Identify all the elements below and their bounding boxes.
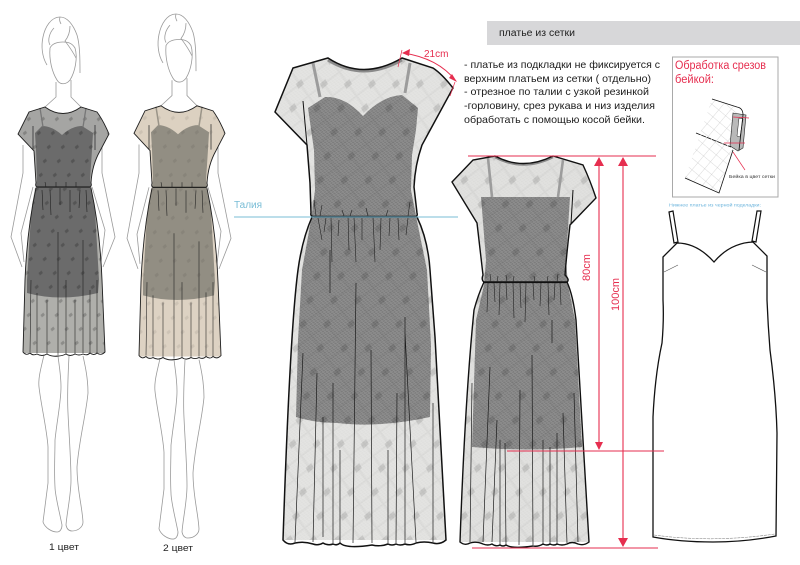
figure 2: dress colour 2	[134, 106, 225, 360]
slip dress caption: Нижнее платье из черной подкладки:	[669, 202, 761, 208]
header text: платье из сетки	[499, 28, 575, 39]
second dress: back view	[452, 156, 596, 547]
description text block: - платье из подкладки не фиксируется с	[464, 59, 660, 71]
dress outline	[452, 156, 596, 282]
arrow: 80cm	[594, 157, 604, 450]
value: 80cm: 80cm	[581, 254, 593, 281]
sleeve measurement: 21cm	[398, 49, 457, 96]
length measurements	[468, 156, 664, 548]
arrow: 100cm	[618, 157, 628, 547]
large dress: front view	[275, 58, 453, 547]
label: waist: Талия	[234, 200, 262, 211]
darts	[664, 265, 766, 272]
hem stitch	[654, 534, 775, 539]
waist marker line	[234, 216, 458, 218]
panel heading: Обработка срезов	[675, 60, 766, 72]
figure 2: croquis outline	[127, 14, 231, 539]
binding caption: Бейка в цвет сетки	[729, 174, 776, 179]
lace pattern	[275, 59, 453, 217]
value: 21cm: 21cm	[424, 49, 448, 60]
straps	[669, 211, 761, 243]
description text block: -горловину, срез рукава и низ изделия	[464, 101, 655, 112]
panel heading	[675, 60, 766, 86]
waist gathers	[487, 274, 561, 322]
waist gathers	[314, 200, 410, 262]
lining under the mesh	[296, 95, 431, 425]
description text block	[464, 59, 660, 126]
skirt folds	[470, 320, 578, 545]
label: colour 2: 2 цвет	[163, 543, 194, 554]
lace pattern	[452, 156, 596, 282]
description text block: верхним платьем из сетки ( отдельно)	[464, 74, 651, 85]
skirt folds	[295, 250, 433, 543]
header bar	[487, 21, 800, 45]
lining under the mesh	[472, 197, 582, 450]
lining straps	[313, 63, 410, 97]
figure 1: dress colour 1	[18, 107, 109, 356]
dress outline	[275, 58, 453, 217]
figure 1: croquis outline	[11, 17, 115, 532]
description text block: обработать с помощью косой бейки.	[464, 114, 645, 126]
label: colour 1: 1 цвет	[49, 542, 80, 553]
panel: binding detail	[672, 57, 778, 197]
slip dress: black lining flat	[653, 211, 777, 542]
lining straps	[488, 158, 563, 197]
panel heading: бейкой:	[675, 74, 714, 86]
neck binding	[328, 60, 402, 71]
value: 100cm: 100cm	[610, 278, 622, 311]
slip body outline	[653, 242, 777, 542]
description text block: - отрезное по талии с узкой резинкой	[464, 87, 649, 98]
